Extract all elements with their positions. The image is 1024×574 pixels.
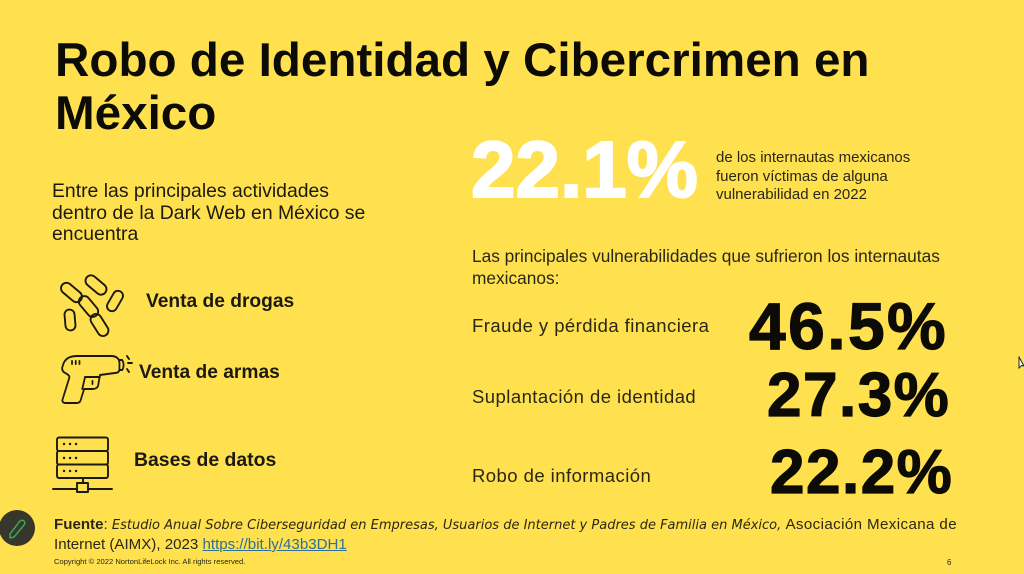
statistic description (716, 149, 910, 203)
page number: 6 (947, 558, 951, 567)
intro text: dark web: dentro de la Dark Web en México se (52, 202, 365, 224)
icon: database server (52, 436, 113, 493)
edit button with pencil icon (0, 510, 35, 546)
label: weapons: Venta de armas (139, 362, 280, 383)
mouse cursor (1018, 356, 1024, 370)
intro text: dark web (52, 180, 365, 245)
value: identity: 27.3% (767, 361, 950, 430)
row: information: Robo de información (472, 465, 651, 486)
value: information: 22.2% (770, 438, 953, 507)
source citation: Fuente: Estudio Anual Sobre Ciberseguridad en Empresas, Usuarios de Internet y Padres de Familia en México, Asociación Mexicana de (54, 516, 957, 533)
title: Robo de Identidad y Cibercrimen en (55, 34, 870, 87)
big statistic: 22.1%: 22.1% (471, 125, 698, 214)
value: fraud: 46.5% (749, 289, 948, 363)
vulnerabilities heading: mexicanos: (472, 268, 559, 288)
intro text: dark web: encuentra (52, 223, 138, 245)
title (55, 34, 870, 140)
source citation (54, 516, 957, 553)
copyright: Copyright © 2022 NortonLifeLock Inc. All rights reserved. (54, 557, 245, 566)
statistic description: fueron víctimas de alguna (716, 168, 888, 184)
label: drugs: Venta de drogas (146, 291, 294, 312)
row: fraud: Fraude y pérdida financiera (472, 315, 709, 336)
label: databases: Bases de datos (134, 449, 276, 471)
title: México (55, 86, 216, 140)
source citation: Internet (AIMX), 2023 https://bit.ly/43b3DH1 (54, 536, 347, 553)
vulnerabilities heading: Las principales vulnerabilidades que sufrieron los internautas (472, 246, 940, 266)
icon: drugs pills (60, 274, 124, 337)
row: identity: Suplantación de identidad (472, 386, 696, 407)
statistic description: de los internautas mexicanos (716, 149, 910, 166)
statistic description: vulnerabilidad en 2022 (716, 186, 867, 203)
intro text: dark web: Entre las principales actividades (52, 180, 329, 202)
vulnerabilities heading (472, 246, 940, 288)
icon: gun (61, 355, 133, 404)
